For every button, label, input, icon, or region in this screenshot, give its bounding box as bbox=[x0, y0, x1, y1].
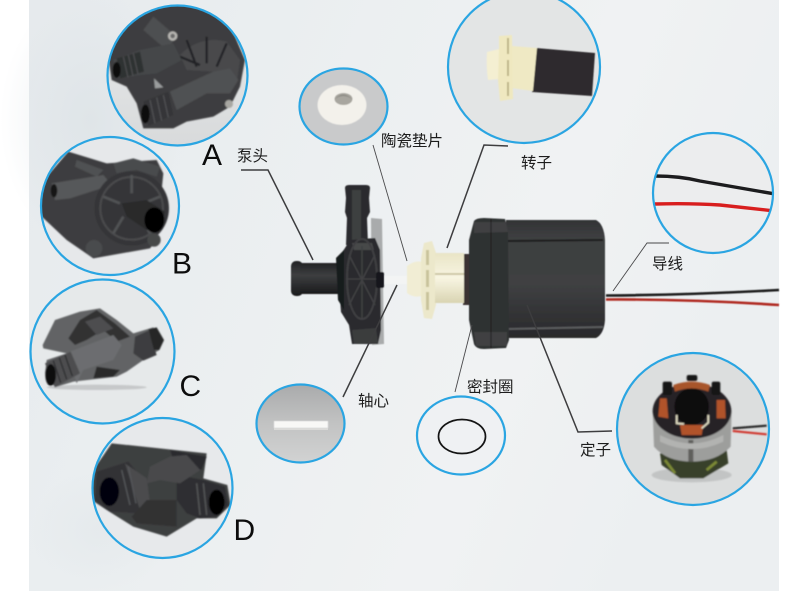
circle: black and red wires bbox=[655, 174, 772, 212]
letter D: D bbox=[234, 514, 255, 547]
label: sealing ring: 密封圈 bbox=[467, 378, 514, 396]
leader: pump head bbox=[241, 170, 313, 260]
circle: ceramic washer bbox=[299, 68, 389, 146]
label: shaft: 轴心 bbox=[358, 392, 389, 410]
circle: sealing ring bbox=[417, 396, 505, 474]
circle ceramic ring bbox=[300, 68, 388, 144]
leader: rotor bbox=[447, 145, 508, 248]
circle shaft ring bbox=[256, 384, 344, 462]
circle: rotor bbox=[448, 0, 600, 143]
circle C ring bbox=[30, 280, 174, 424]
circle D: pump with large threaded ports bbox=[94, 442, 230, 538]
leader: wire bbox=[613, 243, 669, 291]
circle B: pump with barbed ports bbox=[42, 151, 170, 260]
circle rotor ring bbox=[448, 0, 600, 143]
leader: ceramic gasket bbox=[373, 145, 407, 261]
motor wires bbox=[606, 290, 779, 305]
circle D ring bbox=[92, 418, 232, 558]
letter C: C bbox=[180, 370, 201, 403]
stator body bbox=[469, 218, 605, 349]
pump head bbox=[291, 185, 384, 345]
shaft bbox=[385, 276, 409, 284]
circle stator ring bbox=[617, 353, 769, 505]
circle A: pump with threaded ports bbox=[107, 3, 248, 146]
letter B: B bbox=[172, 248, 192, 280]
letter A: A bbox=[202, 139, 222, 172]
circle: shaft bbox=[256, 384, 346, 464]
circle A ring bbox=[108, 6, 248, 146]
label: wire: 导线 bbox=[652, 255, 683, 273]
label: stator: 定子 bbox=[580, 441, 611, 459]
label: ceramic gasket: 陶瓷垫片 bbox=[381, 132, 443, 150]
exploded pump assembly bbox=[291, 185, 779, 349]
rotor impeller bbox=[407, 241, 476, 319]
circle B ring bbox=[41, 137, 179, 275]
circle C: pump with male threads bbox=[42, 307, 166, 391]
circle: stator bbox=[617, 353, 769, 505]
leader: shaft bbox=[343, 285, 397, 397]
circle wires ring bbox=[653, 133, 773, 253]
label: pump head: 泵头 bbox=[237, 147, 268, 165]
label: rotor: 转子 bbox=[521, 154, 552, 172]
leader: sealing ring bbox=[455, 325, 472, 392]
leader: stator bbox=[527, 305, 612, 432]
